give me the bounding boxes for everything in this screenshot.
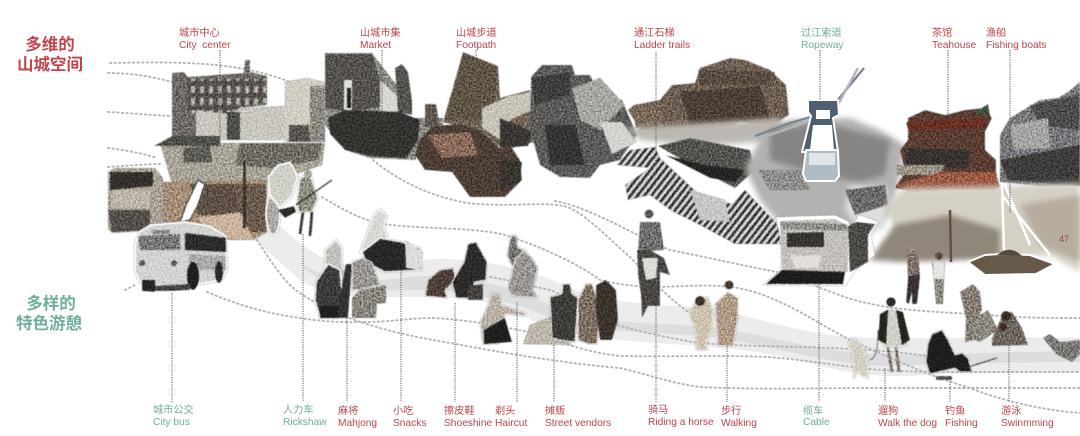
leader: city center xyxy=(219,50,221,143)
label: ropeway: 过江索道 xyxy=(801,26,842,39)
label: haircut: 剃头 xyxy=(495,405,515,417)
label: street vendors xyxy=(545,404,611,429)
label: rickshaw: 人力车 xyxy=(283,403,314,416)
label: fishing boats: 渔船 xyxy=(986,26,1006,39)
label: city bus xyxy=(153,403,194,428)
label: teahouse: Teahouse xyxy=(932,40,977,51)
label: market xyxy=(360,26,401,51)
figure: woman walking dog xyxy=(870,297,910,372)
leader: market xyxy=(381,50,383,120)
label: snacks: Snacks xyxy=(393,418,426,429)
label: market: 山城市集 xyxy=(360,26,401,39)
label: market: Market xyxy=(360,40,391,51)
leader: footpath xyxy=(475,50,477,122)
label: mahjong: 麻将 xyxy=(338,404,358,417)
label: ladder trails xyxy=(634,26,690,51)
leader: snacks xyxy=(400,270,402,402)
photo: stair-side houses xyxy=(530,65,637,178)
label: walking: 步行 xyxy=(721,404,741,417)
leader: cable xyxy=(818,284,820,402)
photo: footpath cliff xyxy=(443,52,534,150)
figure: man pointing xyxy=(480,292,526,344)
photo: ladder trail stairs xyxy=(617,138,785,244)
title: diverse featured recreation: 特色游憩 xyxy=(16,313,82,333)
leader: walk the dog xyxy=(884,368,886,402)
label: shoeshine: 擦皮鞋 xyxy=(444,404,475,417)
label: teahouse: 茶馆 xyxy=(932,26,952,39)
label: ladder trails: 通江石梯 xyxy=(634,26,675,39)
photo: trees and shrubs xyxy=(415,124,522,197)
photo: river valley hillside xyxy=(745,118,905,244)
label: ropeway xyxy=(801,26,844,51)
label: cable: 缆车 xyxy=(803,404,823,417)
label: mahjong: Mahjong xyxy=(338,418,377,429)
label: shoeshine xyxy=(444,404,492,429)
title: diverse featured recreation xyxy=(16,293,82,333)
label: fishing: Fishing xyxy=(945,418,978,429)
label: fishing xyxy=(945,404,978,429)
leader: fishing boats xyxy=(1009,50,1011,212)
label: street vendors: Street vendors xyxy=(545,418,611,429)
label: mahjong xyxy=(338,404,377,429)
label: city center: 城市中心 xyxy=(179,26,220,39)
leader: mahjong xyxy=(346,318,348,402)
figure: city bus xyxy=(135,180,227,292)
label: fishing boats xyxy=(986,26,1047,51)
leader: fishing xyxy=(949,379,951,402)
leader: swimming xyxy=(1008,345,1010,402)
leader: ladder trails xyxy=(655,52,657,165)
photo: riverside city right xyxy=(1000,82,1080,186)
label: riding a horse: 骑马 xyxy=(648,403,668,416)
figure: rider on horse xyxy=(637,210,670,318)
label: footpath: Footpath xyxy=(456,40,496,51)
background ribbon: recreation path xyxy=(250,220,1080,376)
photo: hillside brown houses xyxy=(628,58,789,135)
label: snacks: 小吃 xyxy=(393,404,413,417)
leader: shoeshine xyxy=(454,303,456,402)
label: ladder trails: Ladder trails xyxy=(634,40,690,51)
label: rickshaw: Rickshaw xyxy=(283,417,327,428)
label: cable: Cable xyxy=(803,417,830,428)
label: snacks xyxy=(393,404,426,429)
label: swimming: Swinmming xyxy=(1001,418,1054,429)
label: teahouse xyxy=(932,26,977,51)
label: street vendors: 摊贩 xyxy=(545,404,565,417)
figure: rickshaw xyxy=(266,162,332,236)
label: swimming: 游泳 xyxy=(1001,404,1021,417)
label: city bus: 城市公交 xyxy=(153,403,194,416)
figure: street vendors xyxy=(550,280,618,344)
figure: swimmers group on the bank xyxy=(960,284,1028,346)
label: city bus: City bus xyxy=(153,417,190,428)
photo: old bus and street left xyxy=(108,168,163,233)
figure: dog xyxy=(848,338,868,378)
label: walk the dog: Walk the dog xyxy=(878,418,937,429)
label: city center xyxy=(179,26,231,51)
label: walk the dog xyxy=(878,404,937,429)
label: ropeway: Ropeway xyxy=(801,40,844,51)
figure: children holding hands xyxy=(906,245,945,304)
label: shoeshine: Shoeshine xyxy=(444,418,492,429)
figure: mahjong players xyxy=(315,240,386,318)
label: riding a horse: Riding a horse xyxy=(648,417,714,428)
title: diverse featured recreation: 多样的 xyxy=(26,293,76,313)
label: fishing boats: Fishing boats xyxy=(986,40,1047,51)
photo: teahouse stilted building xyxy=(895,104,1000,192)
label: haircut: Haircut xyxy=(495,418,527,429)
page number: 47 xyxy=(1059,234,1069,244)
figure: person fishing xyxy=(926,330,997,380)
title: multi-dimensional mountain city space: 多维的 xyxy=(25,34,75,54)
label: footpath xyxy=(456,26,497,51)
icon: ropeway gondola xyxy=(755,68,864,181)
photo: market crowd xyxy=(325,53,443,160)
photo: river and far bank sepia xyxy=(870,183,1080,272)
label: walking: Walking xyxy=(721,418,757,429)
label: walk the dog: 遛狗 xyxy=(878,404,898,417)
figure: lone swimmer xyxy=(1043,334,1080,362)
label: city center: City center xyxy=(179,40,231,51)
label: swimming xyxy=(1001,404,1054,429)
photo: fade under brown houses xyxy=(625,118,790,146)
label: footpath: 山城步道 xyxy=(456,26,497,39)
leader: rickshaw xyxy=(302,234,304,402)
photo: wooden fishing boat xyxy=(968,183,1055,275)
figure: goods pile xyxy=(523,317,572,345)
leader: riding a horse xyxy=(655,305,657,402)
label: riding a horse xyxy=(648,403,714,428)
label: fishing: 钓鱼 xyxy=(945,404,965,417)
leader: ropeway xyxy=(819,50,821,100)
figure: haircut pair xyxy=(507,235,538,298)
title: multi-dimensional mountain city space xyxy=(17,34,83,74)
title: multi-dimensional mountain city space: 山城空间 xyxy=(17,54,83,74)
figure: snack vendor xyxy=(360,209,423,272)
label: rickshaw xyxy=(283,403,327,428)
photo: street scene sepia xyxy=(162,160,267,240)
leader: city bus xyxy=(171,293,173,402)
label: cable xyxy=(803,404,830,428)
dotted route lines xyxy=(108,62,1080,413)
leader: walking xyxy=(726,346,728,402)
figure: shoeshine pair xyxy=(425,242,487,300)
photo: city center collage xyxy=(154,60,325,184)
figure: walking couple xyxy=(689,280,738,350)
label: walking xyxy=(721,404,757,429)
label: haircut xyxy=(495,405,527,429)
leader: teahouse xyxy=(947,50,949,115)
leader: street vendors xyxy=(553,345,555,402)
leader: haircut xyxy=(516,302,518,402)
photo: cable car xyxy=(765,216,877,285)
